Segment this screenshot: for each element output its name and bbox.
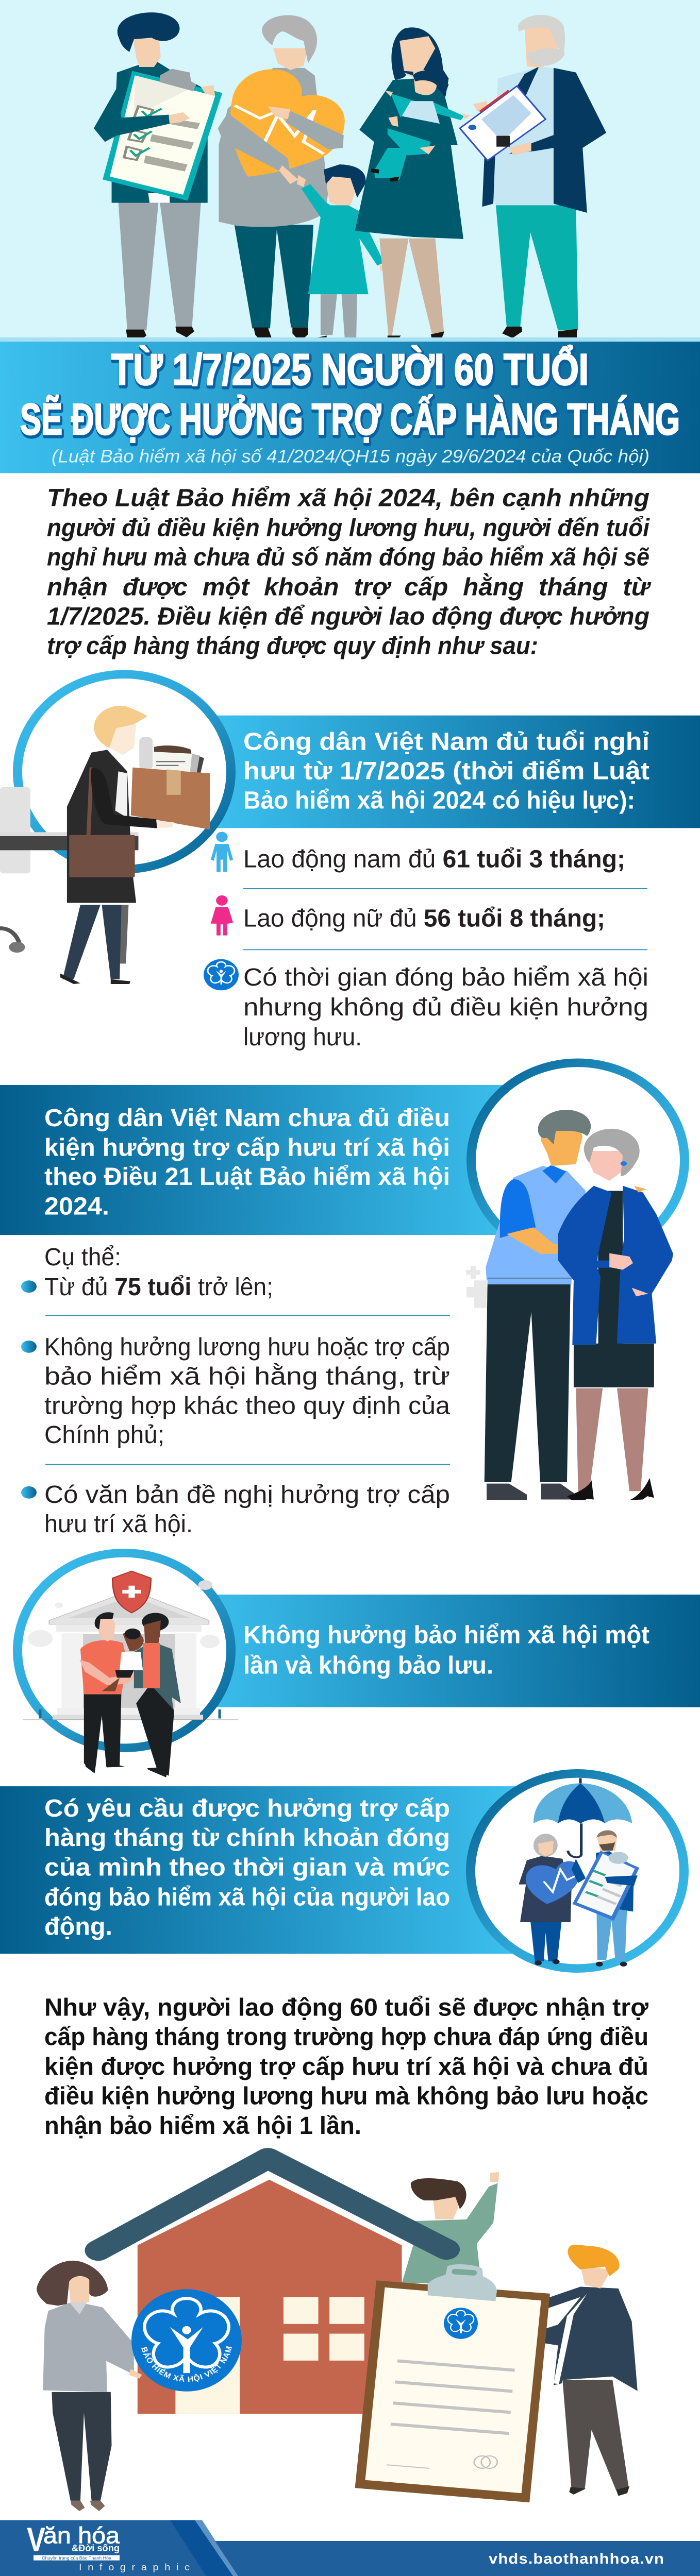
- banner background: [196, 1595, 700, 1707]
- infographic label: Infographic: [79, 2563, 190, 2573]
- icon: social insurance logo: [204, 959, 239, 990]
- figure: man holding certificate: [526, 2245, 638, 2496]
- banner heading text: [44, 1794, 450, 1940]
- figure: person raising arm behind house: [402, 2172, 499, 2283]
- panel: retirement-age condition: [0, 674, 700, 1050]
- item: contribution period: lương hưu.: [243, 1023, 362, 1050]
- bullet: no pension: trường hợp khác theo quy định của: [44, 1392, 450, 1419]
- brand logo: V: [27, 2520, 45, 2559]
- bullet: age: Từ đủ 75 tuổi trở lên;: [44, 1273, 273, 1300]
- banner heading text: [243, 728, 649, 814]
- decorative plus signs: [466, 1266, 494, 1308]
- window: [284, 2297, 364, 2361]
- clipboard certificate: [355, 2264, 550, 2502]
- conclusion paragraph: nhận bảo hiểm xã hội 1 lần.: [44, 2112, 361, 2140]
- circle frame: [471, 1063, 685, 1258]
- logo: Bảo hiểm xã hội Việt Nam badge: [131, 2289, 242, 2392]
- lead-in text: Cụ thể:: [44, 1243, 121, 1270]
- banner heading text: 2024.: [44, 1193, 109, 1220]
- figure: elderly man holding insurance card: [460, 15, 606, 342]
- banner heading text: kiện hưởng trợ cấp hưu trí xã hội: [44, 1134, 450, 1161]
- banner heading text: Công dân Việt Nam đủ tuổi nghỉ: [243, 728, 649, 755]
- figure: child in teal: [297, 164, 389, 346]
- header illustration background: [0, 0, 700, 342]
- panel: not yet eligible for social pension: [0, 1063, 685, 1537]
- intro paragraph: trợ cấp hàng tháng được quy định như sau:: [47, 632, 538, 659]
- house body: [138, 2180, 402, 2414]
- house roof: [98, 2158, 446, 2250]
- intro paragraph: 1/7/2025. Điều kiện để người lao động được hưởng: [47, 602, 649, 630]
- intro paragraph: nhận được một khoản trợ cấp hằng tháng từ: [47, 573, 652, 601]
- icon: female figure: [211, 895, 233, 936]
- brand logo: ăn hóa: [43, 2522, 120, 2548]
- title band: [0, 337, 700, 473]
- banner heading text: của mình theo thời gian và mức: [44, 1854, 450, 1881]
- bullet: no pension: [21, 1333, 450, 1449]
- brand logo: &Đời sống: [72, 2544, 120, 2554]
- panel: no lump-sum, no reservation: [18, 1553, 700, 1777]
- item: contribution period: [243, 963, 648, 1050]
- circle frame: [471, 1773, 684, 1969]
- bullet: no pension: bảo hiểm xã hội hằng tháng, trừ: [44, 1362, 450, 1390]
- banner background: [0, 1786, 515, 1954]
- banner heading text: [44, 1104, 450, 1220]
- illustration: elderly couple: [485, 1110, 673, 1500]
- banner background: [0, 1085, 515, 1235]
- illustration: couple under umbrella: [519, 1778, 639, 1967]
- conclusion paragraph: [44, 1994, 649, 2140]
- item: contribution period: Có thời gian đóng bảo hiểm xã hội: [243, 963, 648, 991]
- figure: grey-haired woman holding heart: [218, 15, 345, 344]
- banner heading text: động.: [44, 1912, 112, 1940]
- item: male age: Lao động nam đủ 61 tuổi 3 tháng;: [243, 845, 625, 873]
- brand logo: [27, 2520, 120, 2561]
- figure: woman holding logo: [37, 2261, 142, 2511]
- circle frame: [18, 674, 231, 869]
- banner heading text: Không hưởng bảo hiểm xã hội một: [243, 1621, 649, 1649]
- intro paragraph: Theo Luật Bảo hiểm xã hội 2024, bên cạnh những: [47, 484, 649, 512]
- banner heading text: Bảo hiểm xã hội 2024 có hiệu lực):: [243, 787, 635, 814]
- intro paragraph: [47, 484, 652, 659]
- banner heading text: Công dân Việt Nam chưa đủ điều: [44, 1104, 450, 1131]
- logo: Bảo hiểm xã hội Việt Nam badge: BẢO HIỂM XÃ HỘI VIỆT NAM: [141, 2346, 232, 2382]
- banner heading text: hưu từ 1/7/2025 (thời điểm Luật: [243, 757, 649, 785]
- banner heading text: [243, 1621, 649, 1679]
- banner background: [216, 716, 700, 828]
- bullet: written request: [21, 1481, 450, 1537]
- footer bar: [0, 2520, 700, 2576]
- conclusion paragraph: kiện được hưởng trợ cấp hưu trí xã hội và chưa đủ: [44, 2053, 648, 2080]
- conclusion paragraph: điều kiện hưởng lương hưu mà không bảo lưu hoặc: [44, 2082, 648, 2110]
- banner heading text: hàng tháng từ chính khoản đóng: [44, 1824, 450, 1851]
- brand logo: Chuyên trang của Báo Thanh Hóa: [42, 2555, 111, 2561]
- figure: mother holding baby: [355, 27, 471, 344]
- bullet: no pension: Chính phủ;: [44, 1421, 164, 1449]
- item: contribution period: nhưng không đủ điều kiện hưởng: [243, 993, 648, 1021]
- subtitle: (Luật Bảo hiểm xã hội số 41/2024/QH15 ngày 29/6/2024 của Quốc hội): [52, 446, 649, 466]
- door: [175, 2297, 240, 2414]
- item: female age: Lao động nữ đủ 56 tuổi 8 tháng;: [243, 904, 605, 932]
- conclusion paragraph: Như vậy, người lao động 60 tuổi sẽ được nhận trợ: [44, 1994, 649, 2021]
- website: vhds.baothanhhoa.vn: [489, 2551, 664, 2567]
- illustration: family in front of insurance building: [23, 1571, 238, 1777]
- illustration: man carrying box: [0, 706, 210, 984]
- banner heading text: lần và không bảo lưu.: [243, 1651, 493, 1679]
- panel: request for monthly allowance: [0, 1773, 684, 1969]
- bullet: written request: Có văn bản đề nghị hưởng trợ cấp: [44, 1481, 450, 1508]
- bullet: written request: hưu trí xã hội.: [44, 1510, 193, 1537]
- figure: man with clipboard: [94, 12, 222, 342]
- illustration: house, people and certificate: [37, 2148, 638, 2511]
- icon: male figure: [211, 832, 233, 872]
- bullet: no pension: Không hưởng lương hưu hoặc trợ cấp: [44, 1333, 450, 1361]
- circle frame: [18, 1553, 231, 1748]
- banner heading text: Có yêu cầu được hưởng trợ cấp: [44, 1794, 450, 1822]
- banner heading text: theo Điều 21 Luật Bảo hiểm xã hội: [44, 1163, 450, 1190]
- illustration: family of five holding documents: [94, 12, 606, 346]
- logo on certificate: [444, 2308, 478, 2339]
- banner heading text: đóng bảo hiểm xã hội của người lao: [44, 1884, 450, 1911]
